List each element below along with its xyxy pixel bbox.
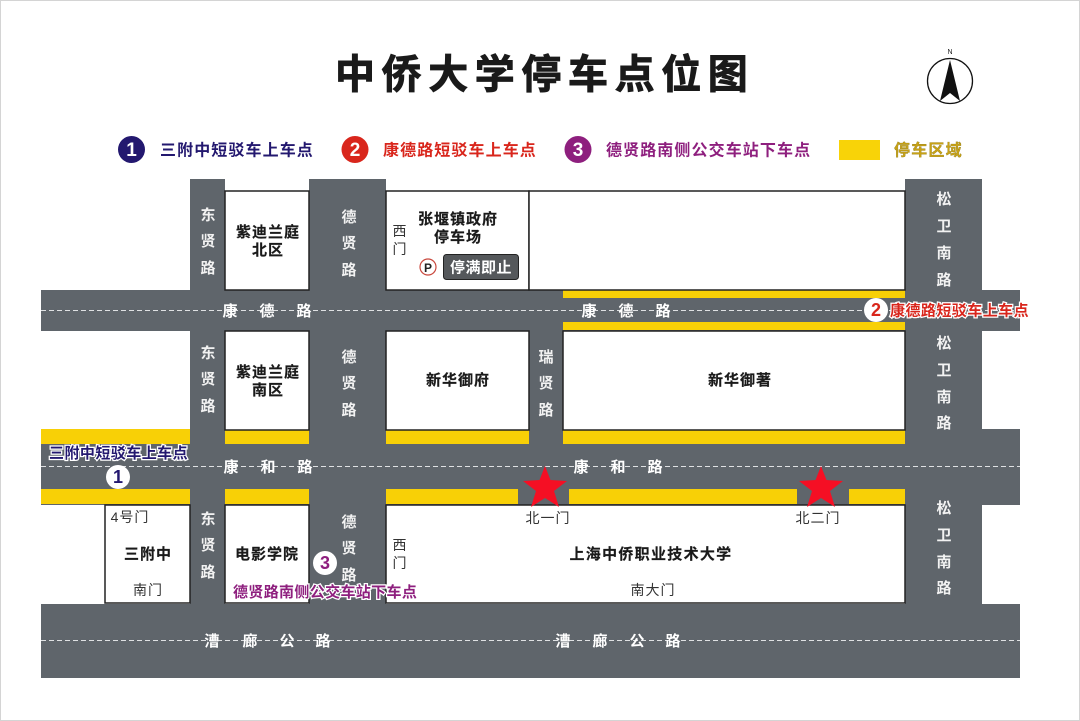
marker 1: 三附中短驳车上车点: 三附中短驳车上车点 xyxy=(49,444,188,462)
road label: 松卫南路 north: 路 xyxy=(936,271,952,289)
road label: 德贤路 north: 德 xyxy=(341,208,357,226)
road network xyxy=(41,179,1020,678)
marker 3: 德贤路南侧公交车站下车点: 德贤路南侧公交车站下车点 xyxy=(233,583,417,601)
label: 4号门: 4号门 xyxy=(111,509,149,525)
label: 紫迪兰庭南区: 紫迪兰庭 xyxy=(236,364,300,381)
road label: 瑞贤路: 路 xyxy=(538,401,554,419)
label: 张堰镇政府停车场: 停车场 xyxy=(434,228,482,246)
road label: 松卫南路 south: 南 xyxy=(936,554,952,571)
road label: 康和路 west xyxy=(223,458,313,476)
road label: 德贤路 north: 贤 xyxy=(341,235,357,252)
road label: 漕廊公路 west: 公 xyxy=(279,633,295,650)
road label: 东贤路 middle: 路 xyxy=(200,397,216,415)
road label: 松卫南路 south xyxy=(936,500,952,597)
road labels: vertical xyxy=(200,191,952,597)
road label: 漕廊公路 west xyxy=(204,632,331,650)
road label: 德贤路 middle: 路 xyxy=(341,401,357,419)
label: 西门 north: 西 xyxy=(392,223,408,239)
icon: parking P with full-stop sign: P xyxy=(424,261,432,275)
road label: 松卫南路 south: 卫 xyxy=(936,527,952,544)
road label: 德贤路 middle xyxy=(341,348,357,419)
label: 新华御著: 新华御著 xyxy=(708,371,772,389)
road label: 康德路 west: 路 xyxy=(296,302,312,320)
building labels xyxy=(124,210,772,563)
road label: 德贤路 south: 路 xyxy=(341,566,357,584)
road label: 瑞贤路: 瑞 xyxy=(538,348,554,366)
label: 南门: 南门 xyxy=(133,582,163,598)
marker 2: 康德路短驳车上车点: 2 xyxy=(871,300,881,320)
marker 1: 三附中短驳车上车点: 1 xyxy=(113,467,123,487)
icon: north arrow compass: N xyxy=(947,49,953,56)
road label: 康和路 east xyxy=(573,458,663,476)
title: 中侨大学停车点位图 xyxy=(335,53,754,97)
marker 2: 康德路短驳车上车点: 康德路短驳车上车点 xyxy=(890,302,1029,320)
label: 西门 south: 门 xyxy=(392,555,408,571)
legend item 2 xyxy=(342,136,537,163)
legend item 1 xyxy=(118,136,314,163)
road label: 东贤路 south: 路 xyxy=(200,563,216,581)
label: 紫迪兰庭南区: 南区 xyxy=(252,382,284,399)
road label: 松卫南路 north: 松 xyxy=(936,191,952,208)
icon: parking P with full-stop sign xyxy=(420,254,518,280)
road label: 康德路 east: 康 xyxy=(581,302,597,320)
icon: north arrow compass xyxy=(928,49,972,104)
road label: 德贤路 middle: 贤 xyxy=(341,375,357,392)
road label: 德贤路 south: 贤 xyxy=(341,540,357,557)
road label: 松卫南路 north xyxy=(936,191,952,289)
road label: 漕廊公路 east: 路 xyxy=(665,632,681,650)
icon: parking P with full-stop sign: 停满即止 xyxy=(450,258,512,276)
legend item: parking area: 停车区域 xyxy=(894,140,963,160)
road label: 康和路 west: 康 xyxy=(223,458,239,476)
legend xyxy=(118,136,963,163)
marker 2: 康德路短驳车上车点 xyxy=(864,298,1029,322)
marker 3: 德贤路南侧公交车站下车点: 3 xyxy=(320,553,330,573)
building blocks xyxy=(105,191,905,603)
road label: 康德路 east: 德 xyxy=(618,302,634,320)
road label: 漕廊公路 west: 廊 xyxy=(242,632,258,650)
road label: 东贤路 south xyxy=(200,510,216,581)
star: 北一门 xyxy=(523,466,567,507)
road label: 康德路 west: 康 xyxy=(222,302,238,320)
road label: 漕廊公路 east: 廊 xyxy=(592,632,608,650)
road label: 康德路 west xyxy=(222,302,312,320)
road label: 松卫南路 middle xyxy=(936,335,952,432)
road label: 康德路 east xyxy=(581,302,671,320)
label: 西门 south: 西 xyxy=(392,537,408,553)
road label: 松卫南路 middle: 松 xyxy=(936,335,952,352)
road label: 瑞贤路: 贤 xyxy=(538,375,554,392)
road label: 松卫南路 middle: 南 xyxy=(936,389,952,406)
road label: 德贤路 middle: 德 xyxy=(341,348,357,366)
label: 三附中: 三附中 xyxy=(124,546,172,563)
road label: 东贤路 south: 东 xyxy=(200,510,216,528)
road label: 东贤路 middle: 贤 xyxy=(200,371,216,388)
road label: 松卫南路 middle: 卫 xyxy=(936,362,952,379)
road label: 康和路 east: 康 xyxy=(573,458,589,476)
road label: 漕廊公路 west: 路 xyxy=(315,632,331,650)
road label: 东贤路 north: 贤 xyxy=(200,233,216,250)
gate labels xyxy=(111,223,840,598)
road label: 漕廊公路 east: 漕 xyxy=(555,632,571,650)
road label: 德贤路 south: 德 xyxy=(341,513,357,531)
road label: 松卫南路 south: 松 xyxy=(936,500,952,517)
road label: 松卫南路 south: 路 xyxy=(936,579,952,597)
road label: 东贤路 north: 路 xyxy=(200,259,216,277)
label: 北二门: 北二门 xyxy=(796,510,840,526)
legend item 3: 3 xyxy=(573,140,583,161)
road label: 漕廊公路 east: 公 xyxy=(629,633,645,650)
legend item: parking area xyxy=(839,140,963,160)
road label: 漕廊公路 east xyxy=(555,632,681,650)
road label: 康和路 west: 路 xyxy=(297,458,313,476)
road label: 松卫南路 middle: 路 xyxy=(936,414,952,432)
star: 北二门 xyxy=(799,466,843,507)
legend item 1: 1 xyxy=(126,140,137,161)
label: 紫迪兰庭北区: 北区 xyxy=(252,242,284,259)
legend item 2: 康德路短驳车上车点 xyxy=(383,140,537,160)
legend item 3 xyxy=(564,136,811,163)
road label: 松卫南路 north: 南 xyxy=(936,245,952,262)
road label: 康德路 west: 德 xyxy=(259,302,275,320)
road label: 德贤路 north xyxy=(341,208,357,279)
road label: 东贤路 middle: 东 xyxy=(200,344,216,362)
marker 1: 三附中短驳车上车点 xyxy=(49,444,188,489)
road label: 康和路 west: 和 xyxy=(260,459,276,476)
road label: 德贤路 north: 路 xyxy=(341,261,357,279)
label: 北一门: 北一门 xyxy=(526,510,570,526)
road label: 康德路 east: 路 xyxy=(655,302,671,320)
marker 3: 德贤路南侧公交车站下车点 xyxy=(233,551,417,601)
label: 张堰镇政府停车场: 张堰镇政府 xyxy=(418,211,498,228)
legend item 1: 三附中短驳车上车点 xyxy=(160,140,314,160)
label: 上海中侨职业技术大学: 上海中侨职业技术大学 xyxy=(569,545,733,563)
road label: 德贤路 south xyxy=(341,513,357,584)
road label: 瑞贤路 xyxy=(538,348,554,419)
label: 电影学院: 电影学院 xyxy=(235,545,299,563)
road label: 松卫南路 north: 卫 xyxy=(936,218,952,235)
parking area strips xyxy=(41,290,905,504)
stars: north gates xyxy=(523,466,843,507)
label: 南大门: 南大门 xyxy=(630,582,676,598)
road labels: horizontal xyxy=(204,302,681,650)
road centre dashes xyxy=(41,310,1020,640)
label: 紫迪兰庭北区: 紫迪兰庭 xyxy=(236,224,300,241)
label: 西门 north: 门 xyxy=(392,241,408,257)
road label: 东贤路 north xyxy=(200,206,216,277)
road label: 康和路 east: 和 xyxy=(610,459,626,476)
road label: 康和路 east: 路 xyxy=(647,458,663,476)
road label: 漕廊公路 west: 漕 xyxy=(204,632,220,650)
road label: 东贤路 south: 贤 xyxy=(200,537,216,554)
legend item 3: 德贤路南侧公交车站下车点 xyxy=(606,140,811,160)
label: 新华御府: 新华御府 xyxy=(426,371,490,389)
road label: 东贤路 north: 东 xyxy=(200,206,216,224)
legend item 2: 2 xyxy=(350,140,360,161)
road label: 东贤路 middle xyxy=(200,344,216,415)
